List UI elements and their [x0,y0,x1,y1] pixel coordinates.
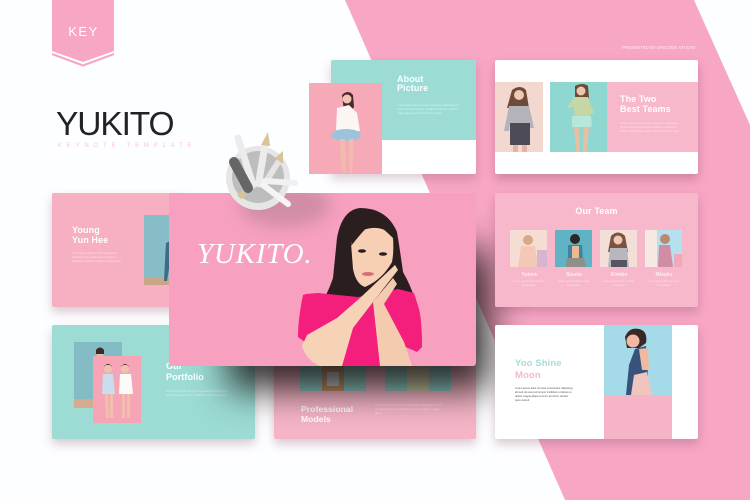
pencil: lower diagonal [263,185,288,204]
KEY ribbon badge [52,0,114,66]
photo: model on teal right [385,342,451,391]
eyes [358,249,387,256]
pencil: tall white [238,138,253,185]
heading: yoo shine moon: Moon [515,370,541,381]
pencil tip [261,132,270,146]
main slide shadow [228,250,490,390]
photo: girl in white top and blue skirt [309,83,382,174]
right forearm [373,278,412,366]
teal header block [331,60,476,140]
t-shirt [298,289,422,366]
heading: our team: Our Team [575,206,618,216]
hair fringe [351,214,395,246]
heading: yoo shine moon: Yoo Shine [515,358,562,369]
heading: our portfolio: Our [166,361,182,371]
photo: blue backdrop [74,342,122,408]
caption text: Lorem ipsum dolor sit amet consectetur [513,280,544,287]
subtitle: KEYNOTE TEMPLATE [58,143,196,149]
photo: two girls on pink [93,356,141,423]
panel: our portfolio [52,325,255,439]
panel: professional models [274,320,476,439]
name: yutora: Yutora [521,272,537,278]
heading: the two best teams [620,94,671,114]
caption text: Lorem ipsum dolor sit amet consectetur [648,280,679,287]
body text: Lorem ipsum dolor sit amet consectetur adipiscing elit sed do eiusmod tempor incididunt ut labore et dolore [166,390,228,397]
heading: the two best teams: The Two [620,94,657,104]
pencil: sharpened right [265,161,279,183]
heading: yoo shine moon [515,358,562,381]
photo: girl in floral top on teal [550,82,607,152]
heading: professional models [301,404,353,424]
heading: young yun hee [72,225,108,245]
heading: professional models: Models [301,414,331,424]
panel: yoo shine moon [495,325,698,439]
title: YUKITO [56,106,174,143]
pencil: horizontal white [265,181,295,183]
presented by label: PRESENTED BY UNICODE STUDIO [622,45,695,50]
photo: misako [645,230,682,267]
body text: Lorem ipsum dolor sit amet consectetur adipiscing elit sed do eiusmod tempor incididunt ut labore et dolore magna aliqua ut enim ad minim veniam quis nostrud [515,387,573,402]
heading: young yun hee: Yun Hee [72,235,108,245]
heading: the two best teams: Best Teams [620,104,671,114]
cover title: YUKITO. [197,238,312,270]
caption text: Lorem ipsum dolor sit amet consectetur [558,280,589,287]
hair back [318,208,420,346]
body text: Lorem ipsum dolor sit amet consectetur adipiscing elit sed do eiusmod tempor incididunt ut labore et dolore magna aliqua ut enim ad minim veniam [397,104,459,115]
body text: Lorem ipsum dolor sit amet consectetur adipiscing elit sed do eiusmod tempor incididunt ut labore et dolore magna aliqua ut enim ad minim veniam quis [620,122,679,133]
body text: Lorem ipsum dolor sit amet consectetur adipiscing elit sed do eiusmod tempor incididunt ut labore et dolore magna aliqua [375,404,442,415]
pink block [604,395,672,439]
photo: girl on blue backdrop [144,215,184,285]
photo: girl in pink t-shirt [236,193,422,366]
body text: Lorem ipsum dolor sit amet consectetur adipiscing elit sed do eiusmod tempor incididunt ut labore et dolore magna aliqua [72,252,121,263]
panel: the two best teams [495,60,698,174]
heading: our portfolio: Portfolio [166,372,204,382]
lips [362,272,374,276]
panel: our team [495,193,698,307]
heading: about picture: About [397,74,424,84]
name: sizuka: Sizuka [566,272,582,278]
KEY label: KEY [68,24,99,39]
left forearm and hand [302,265,398,366]
photo: model on teal left [300,342,366,391]
pencil: sharpened upper [258,145,265,187]
photo: girl in grey sweater [495,82,543,152]
heading: professional models: Professional [301,404,353,414]
icon: pencil cup [226,132,298,210]
name: kimiko: Kimiko [611,272,627,278]
panel: about picture [331,60,476,174]
name: misako: Misako [656,272,672,278]
caption text: Lorem ipsum dolor sit amet consectetur [603,280,634,287]
heading: our portfolio [166,361,204,382]
photo: girl on blue [604,325,672,395]
face [351,228,393,287]
heading: young yun hee: Young [72,225,100,235]
photo: sizuka [555,230,592,267]
photo: yutora [510,230,547,267]
marker: dark grey [234,162,248,188]
panel: main cover slide [169,193,476,366]
pink text block [607,82,698,152]
photo: kimiko [600,230,637,267]
heading: about picture: Picture [397,83,428,93]
cup body [226,146,290,210]
pencil tip right [275,151,283,164]
small pencil tip at cup rim [237,190,246,199]
heading: about picture [397,74,428,93]
panel: young yun hee [52,193,187,307]
pencil cup cast shadow [240,183,330,227]
